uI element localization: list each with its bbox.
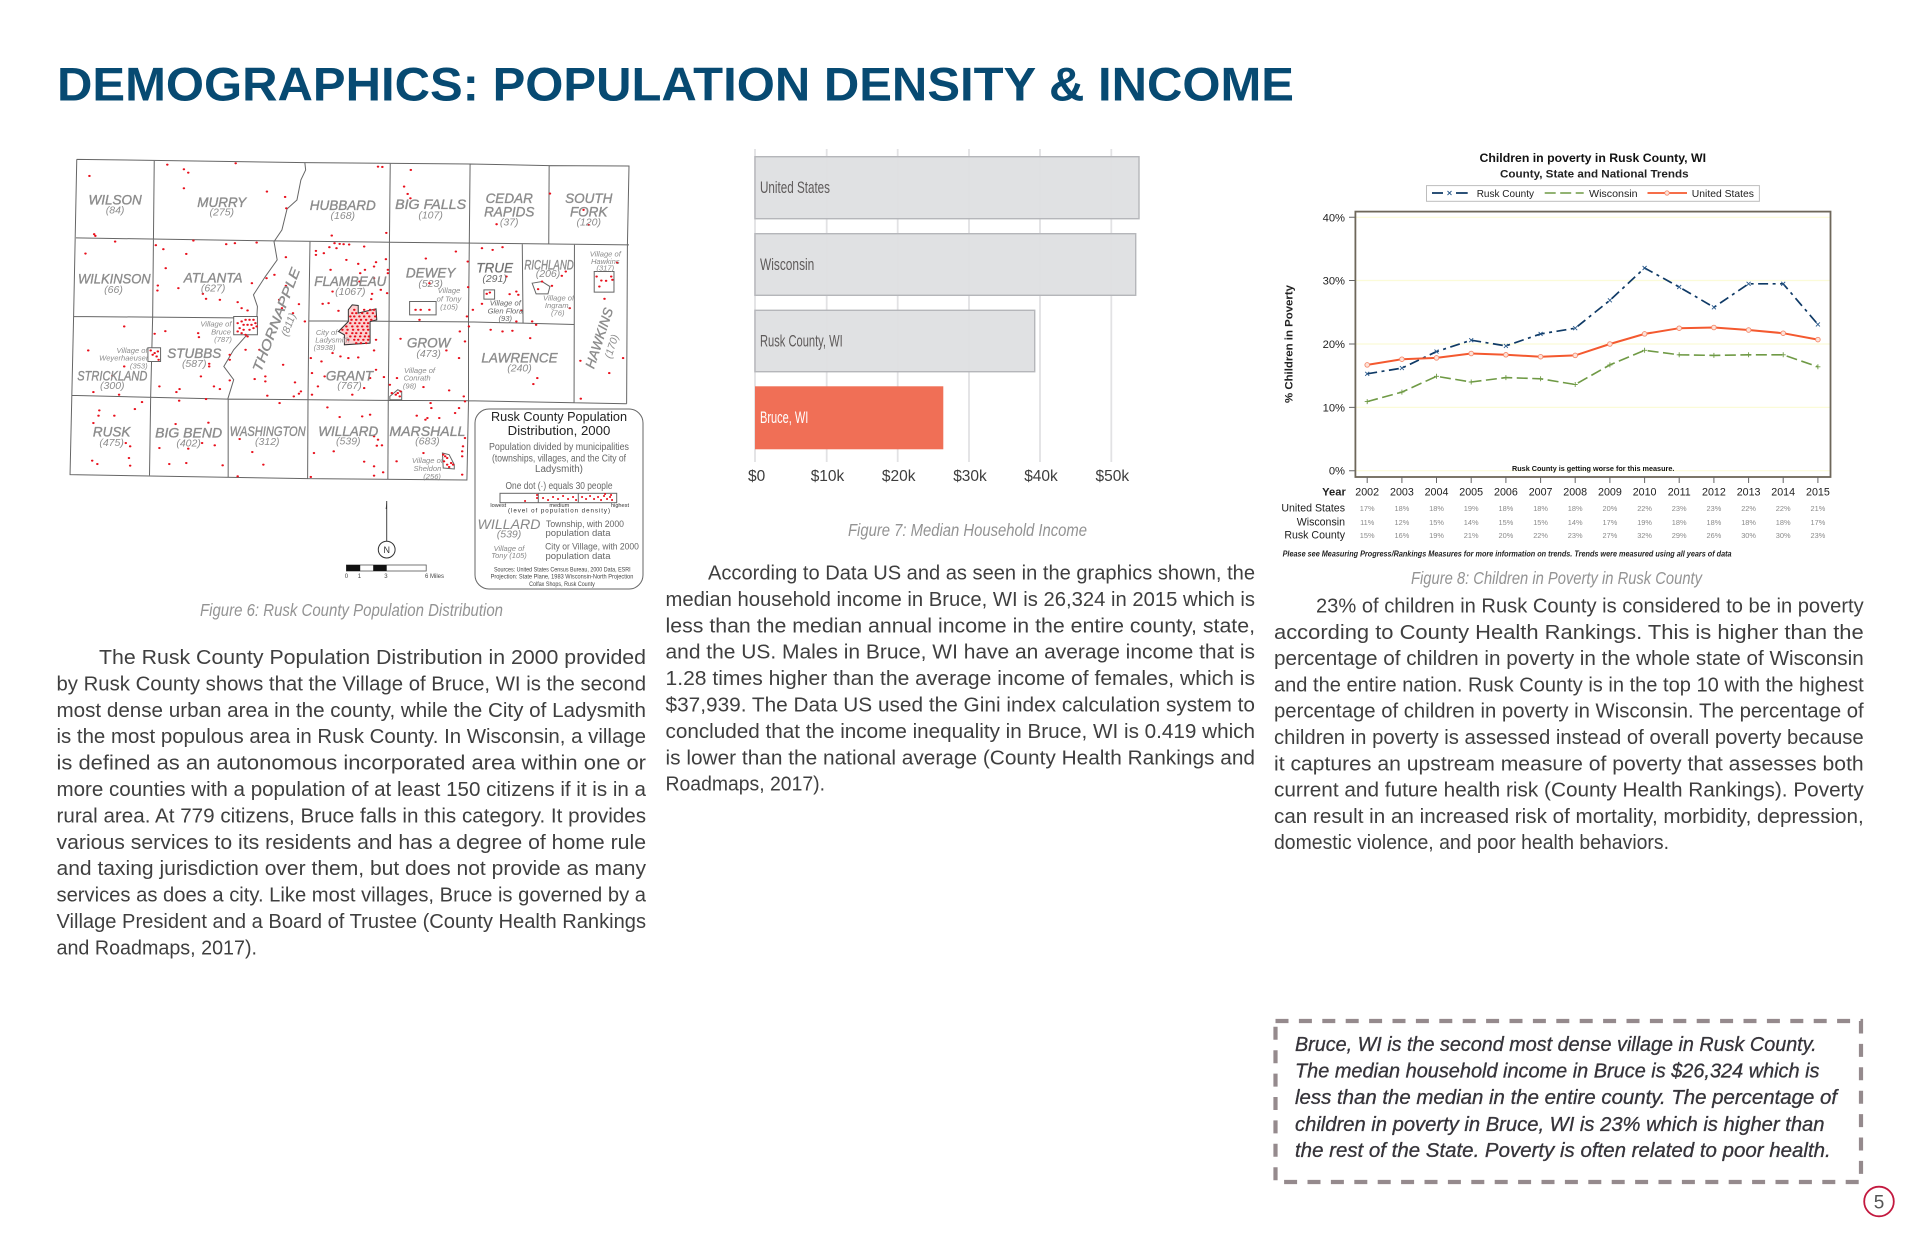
text block: population distribution: rural area. At 779 citizens, Bruce falls in this category. It provides (56, 805, 646, 827)
income axis labels: $30k (953, 468, 987, 485)
chart note inside plot: Rusk County is getting worse for this measure. (1512, 464, 1674, 473)
map township labels: RUSK (93, 424, 131, 440)
scale bar: 0 (345, 574, 349, 580)
year and data table: 20% (1499, 531, 1514, 540)
map township labels: FORK (570, 204, 608, 220)
map township labels: (120) (576, 217, 601, 229)
y axis (1284, 212, 1345, 478)
map township labels: LAWRENCE (481, 351, 559, 366)
map township labels: (240) (507, 362, 532, 374)
bar: Wisconsin (755, 234, 1136, 295)
year and data table: 22% (1533, 531, 1548, 540)
year and data table: United States (1281, 503, 1345, 515)
map township labels: RAPIDS (484, 204, 534, 220)
year and data table: 18% (1672, 518, 1687, 527)
year and data table: 18% (1707, 518, 1722, 527)
text block: median income: and the US. Males in Bruce, WI have an average income that is (666, 642, 1255, 664)
year and data table: 18% (1533, 504, 1548, 513)
income axis labels: $10k (811, 468, 845, 485)
text block: children in poverty: percentage of children in poverty in Wisconsin. The percentage of (1274, 701, 1864, 723)
map township labels: (523) (418, 278, 443, 290)
text block: children in poverty: domestic violence, and poor health behaviors. (1274, 832, 1669, 854)
year and data table: 26% (1707, 531, 1722, 540)
y axis: 20% (1323, 339, 1345, 351)
year and data table: 14% (1464, 518, 1479, 527)
map township labels: WILKINSON (78, 272, 151, 287)
year and data table: 27% (1603, 531, 1618, 540)
map township labels: HUBBARD (310, 198, 376, 213)
text block: median income: is lower than the national average (County Health Rankings and (666, 747, 1255, 769)
map legend: Colfax Shops, Rusk County (529, 582, 595, 588)
map township grid (70, 159, 629, 480)
callout: key findings: the rest of the State. Poverty is often related to poor health. (1295, 1140, 1831, 1162)
map township labels: Hawkins (591, 257, 620, 266)
y axis: 10% (1323, 402, 1345, 414)
map township labels: Village of (412, 456, 444, 465)
caption: figure 7: Figure 7: Median Household Income (848, 520, 1087, 540)
map township labels: (3938) (314, 343, 336, 352)
chart legend: United States (1692, 188, 1754, 200)
map township labels: Bruce (211, 327, 231, 336)
map township labels: (275) (210, 207, 234, 219)
text block: population distribution: and Roadmaps, 2017). (56, 937, 257, 959)
text block: median income: median household income in Bruce, WI is 26,324 in 2015 which is (666, 589, 1255, 611)
map township labels: (170) (603, 333, 621, 360)
year and data table: 15% (1499, 518, 1514, 527)
year and data table: 32% (1637, 531, 1652, 540)
text block: children in poverty: and the entire nation. Rusk County is in the top 10 with the highest (1274, 674, 1864, 696)
map legend: One dot (·) equals 30 people (506, 481, 613, 492)
map township labels: Village of (543, 293, 575, 302)
map legend: (539) (497, 529, 521, 541)
year and data table: 23% (1672, 504, 1687, 513)
year and data table: 2006 (1494, 487, 1518, 499)
page number: 5 (1874, 1192, 1884, 1214)
year and data table: 15% (1360, 531, 1375, 540)
text block: children in poverty (1274, 596, 1864, 854)
map township labels: (787) (214, 335, 232, 344)
text block: median income: less than the median annual income in the entire county, state, (666, 615, 1255, 637)
map township labels: (587) (182, 358, 206, 370)
text block: population distribution (56, 647, 647, 959)
income axis labels: $50k (1095, 468, 1129, 485)
year and data table: 19% (1464, 504, 1479, 513)
text block: children in poverty: 23% of children in Rusk County is considered to be in poverty (1316, 596, 1864, 618)
map legend: Distribution, 2000 (508, 423, 610, 438)
year and data table: Year (1322, 487, 1346, 499)
year and data table: 23% (1568, 531, 1583, 540)
map legend: population data (546, 551, 611, 562)
map legend: population data (546, 528, 611, 539)
map township labels: (353) (130, 361, 148, 370)
income axis labels: $20k (882, 468, 916, 485)
map township labels: BIG BEND (155, 426, 222, 440)
text block: population distribution: most dense urban area in the county, while the City of Ladysmith (56, 700, 646, 722)
year and data table: 2005 (1459, 487, 1483, 499)
chart legend (1426, 186, 1759, 201)
bar: Wisconsin: Wisconsin (760, 255, 814, 274)
map legend: (level of population density) (508, 508, 610, 514)
map township labels: (168) (331, 210, 355, 222)
map township labels: DEWEY (406, 266, 456, 281)
text block: population distribution: The Rusk County Population Distribution in 2000 provided (99, 647, 646, 669)
year and data table: 18% (1776, 518, 1791, 527)
map township labels: (37) (500, 217, 519, 229)
scale bar: 3 (384, 574, 388, 580)
text block: median income: concluded that the income inequality in Bruce, WI is 0.419 which (666, 721, 1255, 743)
map township labels: GRANT (326, 368, 375, 383)
scale bar: 1 (358, 574, 362, 580)
year and data table: 30% (1741, 531, 1756, 540)
map township labels: STRICKLAND (77, 368, 148, 383)
map township labels: Ladysmith (315, 336, 350, 345)
map township labels: MARSHALL (389, 424, 465, 439)
year and data table: 2004 (1425, 487, 1448, 499)
chart legend: Wisconsin (1589, 188, 1638, 200)
map township labels: Village of (490, 299, 522, 308)
year and data table: 14% (1568, 518, 1583, 527)
north arrow: N (383, 545, 390, 555)
year and data table: 18% (1395, 504, 1410, 513)
map legend: Rusk County Population (491, 409, 627, 424)
map township labels: TRUE (476, 260, 514, 275)
map township labels: (291) (482, 273, 507, 285)
map legend (475, 409, 643, 589)
year and data table: 19% (1637, 518, 1652, 527)
bar: Rusk County (755, 310, 1035, 372)
map township labels: (93) (499, 314, 513, 323)
map township labels: (76) (551, 309, 565, 318)
year and data table: Rusk County (1284, 530, 1346, 542)
y axis: % Children in Poverty (1284, 284, 1296, 403)
map legend: Village of (494, 544, 525, 553)
year and data table: 2012 (1702, 487, 1726, 499)
year and data table: 21% (1811, 504, 1826, 513)
map township labels: BIG FALLS (395, 197, 466, 212)
year and data table: 20% (1603, 504, 1618, 513)
map township labels: (206) (536, 268, 560, 280)
map township labels: (1067) (335, 286, 365, 298)
callout: key findings: children in poverty in Bruce, WI is 23% which is higher than (1295, 1114, 1824, 1136)
year and data table: 21% (1464, 531, 1479, 540)
map population dots (85, 163, 623, 477)
map township labels: Village of (590, 250, 622, 259)
map township labels: SOUTH (565, 191, 613, 206)
year and data table: 2014 (1771, 487, 1795, 499)
year and data table: 17% (1811, 518, 1826, 527)
map township labels: CEDAR (486, 191, 533, 206)
plot area (1349, 212, 1830, 483)
map township labels: STUBBS (167, 346, 221, 361)
map township labels: (402) (176, 438, 201, 450)
map township labels: (84) (106, 205, 124, 217)
page number (1864, 1187, 1894, 1216)
map township labels: WASHINGTON (230, 424, 306, 439)
map township labels: (627) (201, 282, 225, 294)
year and data table: 2007 (1529, 487, 1553, 499)
map township labels: (539) (336, 436, 361, 448)
bar: United States: United States (760, 178, 830, 197)
north arrow (378, 501, 395, 558)
map township labels (77, 191, 622, 481)
map township labels: (317) (596, 264, 615, 273)
map township labels: Village of (117, 346, 149, 355)
text block: median income: According to Data US and as seen in the graphics shown, the (708, 562, 1255, 584)
year and data table: 23% (1811, 531, 1826, 540)
text block: children in poverty: percentage of children in poverty in the whole state of Wisconsin (1274, 648, 1864, 670)
year and data table: 18% (1568, 504, 1583, 513)
text block: population distribution: is defined as an autonomous incorporated area within one or (56, 753, 646, 775)
year and data table: 18% (1741, 518, 1756, 527)
year and data table: 2013 (1737, 487, 1761, 499)
chart title (1480, 151, 1706, 180)
year and data table: 17% (1603, 518, 1618, 527)
map township labels: THORNAPPLE (250, 265, 304, 374)
map legend: Sources: United States Census Bureau, 2000 Data, ESRI (494, 567, 631, 573)
income axis labels (748, 468, 1129, 485)
callout: key findings: less than the median in the entire county. The percentage of (1295, 1087, 1839, 1109)
text block: children in poverty: current and future health risk (County Health Rankings). Poverty (1274, 780, 1864, 802)
year and data table: 2009 (1598, 487, 1622, 499)
year and data table: 2010 (1633, 487, 1657, 499)
map township labels: WILLARD (318, 424, 379, 439)
line: Rusk County (1367, 268, 1818, 374)
map township labels: Village of (200, 319, 232, 328)
map legend: Projection: State Plane, 1983 Wisconsin-North Projection (491, 575, 633, 581)
map township labels: FLAMBEAU (314, 274, 387, 289)
y axis: 30% (1323, 276, 1345, 288)
map legend: City or Village, with 2000 (545, 542, 639, 552)
map township labels: Conrath (404, 374, 431, 383)
year and data table: 15% (1429, 518, 1444, 527)
text block: population distribution: Village President and a Board of Trustee (County Health Rankings (56, 911, 646, 933)
year and data table: 30% (1776, 531, 1791, 540)
text block: median income: $37,939. The Data US used the Gini index calculation system to (666, 694, 1255, 716)
text block: children in poverty: can result in an increased risk of mortality, morbidity, depression, (1274, 806, 1864, 828)
map township labels: GROW (407, 336, 452, 351)
callout: key findings: The median household income in Bruce is $26,324 which is (1295, 1061, 1820, 1083)
income axis labels: $40k (1024, 468, 1058, 485)
title: DEMOGRAPHICS: POPULATION DENSITY & INCOME (57, 58, 1294, 110)
text block: population distribution: and taxing jurisdiction over them, but does not provide as many (56, 858, 646, 880)
scale bar (345, 565, 444, 580)
map legend: medium (549, 503, 570, 509)
map township labels: ATLANTA (183, 271, 242, 286)
map township labels: (312) (255, 436, 280, 448)
caption: figure 8: Figure 8: Children in Poverty in Rusk County (1411, 568, 1703, 588)
text block: population distribution: various services to its residents and has a degree of home rule (56, 832, 646, 854)
text block: population distribution: more counties with a population of at least 150 citizens if it is in a (56, 779, 647, 801)
map township labels: City of (316, 328, 338, 337)
map township labels: Weyerhaeuser (99, 353, 149, 362)
income axis labels: $0 (748, 468, 766, 485)
y axis: 40% (1323, 212, 1345, 224)
year and data table: 22% (1637, 504, 1652, 513)
line: Wisconsin (1367, 350, 1818, 402)
caption: figure 6: Figure 6: Rusk County Population Distribution (200, 600, 503, 620)
map township labels: (98) (403, 382, 417, 391)
year and data table: 2002 (1355, 487, 1379, 499)
map township labels: WILSON (88, 192, 142, 208)
panel: population map (70, 159, 643, 589)
text block: population distribution: by Rusk County shows that the Village of Bruce, WI is the second (56, 673, 646, 695)
map township labels: HAWKINS (582, 306, 616, 370)
chart legend: Rusk County (1477, 188, 1535, 200)
map township labels: (683) (415, 436, 440, 448)
map township labels: of Tony (437, 294, 463, 303)
bar chart: median household income (748, 149, 1139, 485)
text block: children in poverty: it captures an upstream measure of poverty that assesses both (1274, 753, 1864, 775)
year and data table: 2011 (1668, 487, 1691, 499)
bar: Rusk County: Rusk County, WI (760, 332, 843, 350)
year and data table: 2015 (1806, 487, 1830, 499)
year and data table: 18% (1429, 504, 1444, 513)
map legend: (townships, villages, and the City of (492, 454, 626, 464)
map township labels: Village (438, 286, 460, 295)
year and data table: 19% (1429, 531, 1444, 540)
year and data table: 17% (1360, 504, 1375, 513)
map legend: highest (611, 503, 629, 509)
map township labels: (66) (104, 284, 123, 296)
map township labels: Ingram, (545, 301, 571, 310)
map legend: Ladysmith) (535, 464, 583, 475)
text block: median income: 1.28 times higher than the average income of females, which is (666, 668, 1255, 690)
year and data table: 16% (1395, 531, 1410, 540)
year and data table: 22% (1776, 504, 1791, 513)
map township labels: Glen Flora (488, 306, 523, 315)
chart footnote: Please see Measuring Progress/Rankings Measures for more information on trends. Trends were measured using all years of data (1283, 550, 1732, 558)
year and data table: 2008 (1563, 487, 1587, 499)
year and data table: 29% (1672, 531, 1687, 540)
map legend: lowest (490, 503, 507, 509)
map township labels: (767) (337, 380, 362, 392)
text block: median income (666, 562, 1255, 796)
year and data table: 2003 (1390, 487, 1414, 499)
y axis: 0% (1329, 466, 1345, 478)
bar: Bruce (755, 386, 943, 449)
map legend: Population divided by municipalities (489, 442, 629, 453)
text block: population distribution: services as does a city. Like most villages, Bruce is governed by a (56, 885, 647, 907)
text block: children in poverty: children in poverty is assessed instead of overall poverty because (1274, 727, 1864, 749)
map township labels: RICHLAND (524, 257, 574, 272)
map township labels: (300) (100, 380, 125, 392)
map township labels: (107) (418, 209, 443, 221)
callout: key findings (1276, 1021, 1861, 1182)
text block: median income: Roadmaps, 2017). (666, 774, 825, 796)
year and data table: 11% (1360, 518, 1375, 527)
map township labels: (475) (99, 437, 124, 449)
map township labels: MURRY (197, 195, 247, 210)
map township labels: Village of (404, 366, 436, 375)
year and data table: 18% (1499, 504, 1514, 513)
map legend: WILLARD (478, 517, 541, 532)
map township labels: (256) (423, 472, 441, 481)
bar: United States (755, 157, 1139, 219)
chart title: Children in poverty in Rusk County, WI (1480, 151, 1706, 165)
map township labels: (811) (279, 312, 299, 338)
bar: Bruce: Bruce, WI (760, 408, 808, 427)
map township labels: (473) (416, 348, 441, 360)
map township labels: Sheldon (413, 464, 441, 473)
text block: population distribution: is the most populous area in Rusk County. In Wisconsin, a village (56, 726, 646, 748)
year and data table (1281, 487, 1830, 542)
chart title: County, State and National Trends (1500, 168, 1689, 180)
year and data table: 22% (1741, 504, 1756, 513)
year and data table: 12% (1395, 518, 1410, 527)
line: United States (1367, 328, 1818, 365)
year and data table: Wisconsin (1297, 516, 1345, 528)
callout: key findings: Bruce, WI is the second most dense village in Rusk County. (1295, 1034, 1817, 1056)
map township labels: (105) (440, 302, 458, 311)
year and data table: 15% (1533, 518, 1548, 527)
scale bar: 6 Miles (425, 574, 444, 580)
line chart: children in poverty (1281, 151, 1830, 558)
map legend: Township, with 2000 (546, 519, 624, 530)
year and data table: 23% (1707, 504, 1722, 513)
text block: children in poverty: according to County Health Rankings. This is higher than the (1274, 622, 1864, 644)
map legend: Tony (105) (491, 551, 527, 560)
